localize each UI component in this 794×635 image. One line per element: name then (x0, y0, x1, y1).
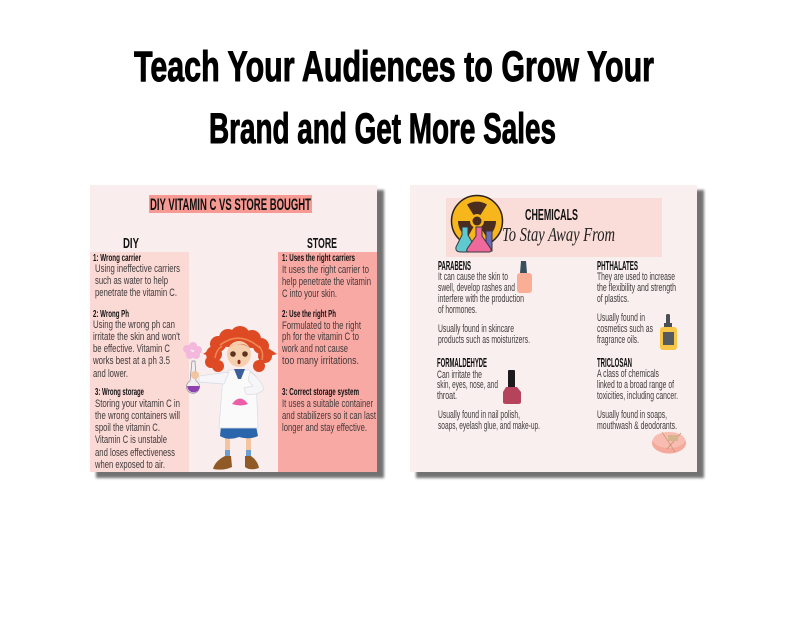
column: DIY: such as water to help (95, 275, 168, 287)
section: formaldehyde: Usually found in nail polish, (438, 409, 520, 421)
column: store: 2: Use the right Ph (282, 309, 336, 320)
section: parabens: PARABENS (438, 259, 471, 273)
section: phthalates: of plastics. (597, 293, 629, 305)
legs (225, 438, 230, 458)
section: parabens: products such as moisturizers. (438, 334, 530, 346)
heading band: chemicals (446, 198, 662, 257)
column: store: longer and stay effective. (282, 422, 367, 434)
column: DIY: 2: Wrong Ph (93, 309, 129, 320)
column: DIY: Using ineffective carriers (95, 263, 180, 275)
column: store: ph for the vitamin C to (282, 331, 359, 343)
section: phthalates: cosmetics such as (597, 323, 653, 335)
column: store: STORE (307, 235, 337, 252)
heading band: chemicals: CHEMICALS (525, 207, 578, 224)
section: formaldehyde (437, 356, 540, 432)
icon: nail polish (503, 370, 521, 404)
pink vapor (183, 342, 202, 359)
section: triclosan: mouthwash & deodorants. (597, 420, 677, 432)
section: parabens: It can cause the skin to (438, 271, 508, 283)
column: DIY: and lower. (93, 368, 128, 380)
column: store: and stabilizers so it can last (282, 410, 377, 422)
section: triclosan: A class of chemicals (597, 368, 659, 380)
column: store: C into your skin. (282, 288, 337, 300)
column: DIY: DIY (123, 235, 139, 252)
face (227, 341, 251, 367)
icon: scientist girl (183, 326, 277, 470)
pink chest flask (232, 398, 248, 406)
section: triclosan: toxicities, including cancer. (597, 390, 678, 402)
section: triclosan (597, 356, 686, 454)
shoes (213, 456, 232, 470)
section: phthalates: PHTHALATES (597, 259, 638, 273)
section: parabens: Usually found in skincare (438, 323, 514, 335)
section: formaldehyde: skin, eyes, nose, and (437, 379, 498, 391)
hand (191, 371, 199, 379)
flasks (456, 227, 475, 252)
section: phthalates: They are used to increase (597, 271, 675, 283)
column: store: too many irritations. (282, 355, 359, 367)
column: DIY: when exposed to air. (94, 459, 165, 471)
column: store: help penetrate the vitamin (282, 276, 371, 288)
title (134, 43, 654, 153)
section: parabens (438, 259, 532, 346)
column: DIY: and loses effectiveness (95, 447, 175, 459)
section: triclosan: Usually found in soaps, (597, 409, 667, 421)
panel: chemicals to stay away from (410, 185, 704, 478)
column: DIY: works best at a ph 3.5 (92, 355, 170, 367)
heading: DIY vitamin C vs store bought (149, 195, 312, 214)
section: phthalates: the flexibility and strength (597, 282, 676, 294)
section: formaldehyde: Can irritate the (437, 369, 482, 381)
section: formaldehyde: throat. (437, 390, 457, 402)
column: DIY: penetrate the vitamin C. (95, 287, 177, 299)
column: DIY: Using the wrong ph can (93, 319, 175, 331)
column: DIY (90, 235, 189, 472)
icon: serum dropper bottle (660, 314, 677, 350)
section: phthalates: Usually found in (597, 312, 645, 324)
section: triclosan: linked to a broad range of (597, 379, 675, 391)
column: store: work and not cause (281, 343, 348, 355)
column: DIY: Storing your vitamin C in (95, 398, 180, 410)
hair (203, 326, 277, 372)
column: DIY: the wrong containers will (95, 410, 180, 422)
column: DIY: be effective. Vitamin C (93, 343, 170, 355)
section: phthalates (597, 259, 677, 350)
lab coat and arms (219, 370, 258, 428)
column: store: 3: Correct storage system (282, 387, 359, 398)
column: DIY: irritate the skin and won't (93, 331, 181, 343)
icon: soap bar (652, 432, 686, 454)
heading: DIY vitamin C vs store bought: DIY VITAMIN C VS STORE BOUGHT (150, 196, 311, 214)
icon: foundation bottle (517, 261, 532, 293)
column: DIY: 1: Wrong carrier (93, 253, 141, 264)
panel: DIY vitamin C vs store bought (90, 185, 384, 478)
section: formaldehyde: FORMALDEHYDE (437, 356, 487, 370)
column: store: Formulated to the right (282, 320, 362, 332)
held flask (186, 361, 199, 393)
section: parabens: swell, develop rashes and (438, 282, 515, 294)
section: parabens: of hormones. (438, 304, 477, 316)
column: store: It uses the right carrier to (282, 264, 369, 276)
skirt (220, 426, 258, 439)
collar (234, 369, 245, 379)
section: triclosan: TRICLOSAN (597, 356, 632, 370)
section: phthalates: fragrance oils. (597, 334, 639, 346)
section: parabens: interfere with the production (438, 293, 524, 305)
column: store (278, 235, 377, 472)
column: DIY: spoil the vitamin C. (95, 422, 160, 434)
column: store: 1: Uses the right carriers (282, 253, 355, 264)
title: Brand and Get More Sales (209, 105, 556, 153)
column: DIY: 3: Wrong storage (95, 387, 144, 398)
section: formaldehyde: soaps, eyelash glue, and make-up. (438, 420, 540, 432)
icon: radiation symbol with flasks (452, 196, 502, 252)
column: DIY: Vitamin C is unstable (95, 434, 167, 446)
column: store: It uses a suitable container (282, 398, 373, 410)
heading band: chemicals: To Stay Away From (502, 224, 615, 246)
